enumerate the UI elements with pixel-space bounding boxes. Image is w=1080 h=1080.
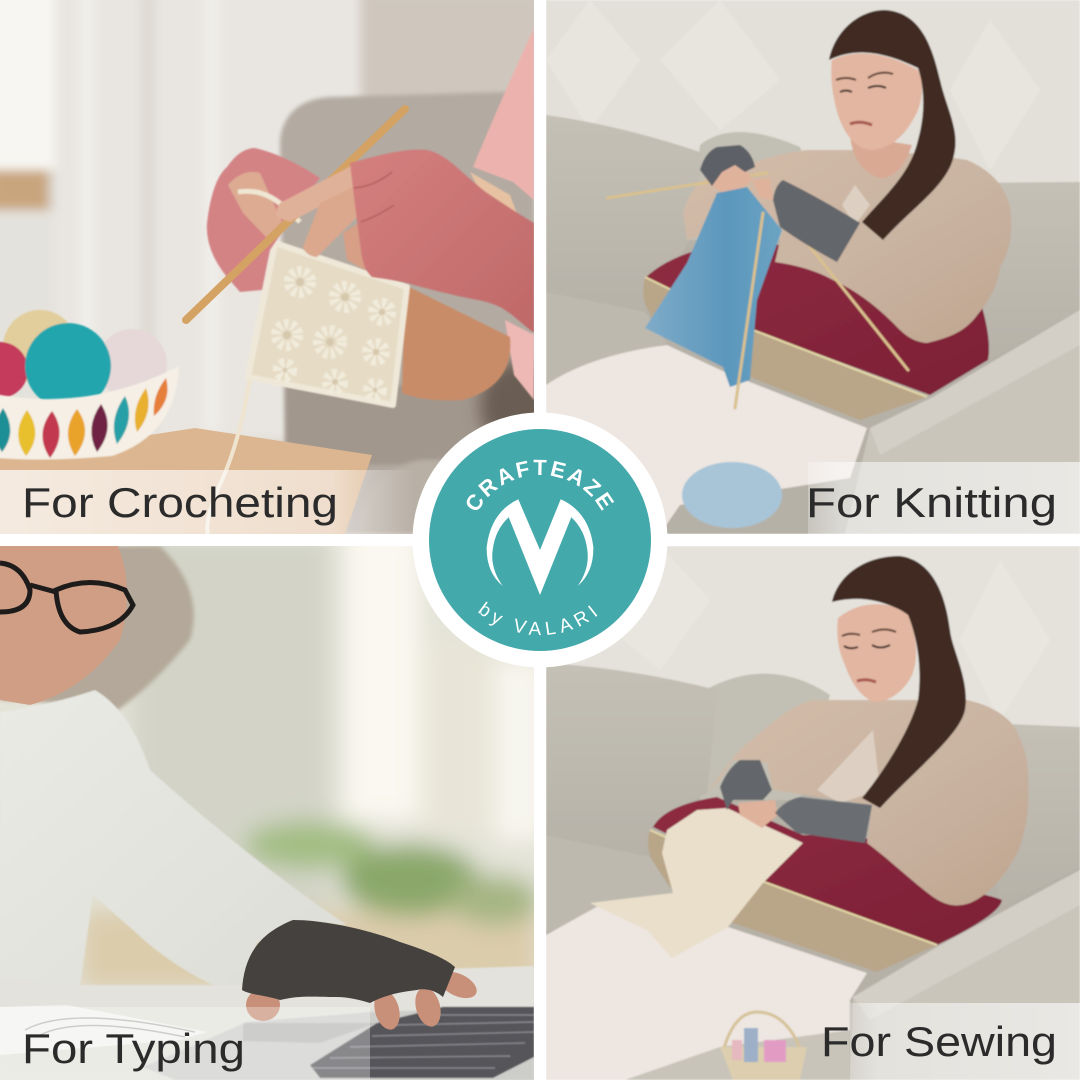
glasses [0, 563, 133, 632]
crochet square [248, 243, 407, 405]
panel: sewing photo [546, 546, 1080, 1080]
grey gloved hands [700, 145, 860, 262]
blue knitted panel [645, 187, 782, 387]
dark gloved hand [242, 920, 455, 1003]
brand name: CRAFTEAZE [466, 460, 614, 511]
pink top and skin [402, 28, 534, 400]
room backdrop [0, 0, 550, 550]
label: For Knitting: For Knitting [806, 479, 1057, 526]
face [837, 604, 916, 702]
sewing basket [720, 1012, 807, 1080]
knitting needles [607, 173, 908, 408]
hair [829, 10, 956, 240]
white skirt [546, 905, 867, 1080]
panel: typing photo [0, 530, 560, 1080]
open notebook [0, 1005, 207, 1055]
label: For Sewing: For Sewing [821, 1018, 1057, 1065]
label band [808, 462, 1080, 534]
armchair [280, 92, 550, 534]
grey hair [0, 546, 194, 715]
face [0, 546, 127, 705]
panel: crocheting photo [0, 0, 550, 550]
sweater [707, 700, 1028, 905]
sofa [546, 663, 1080, 1080]
label band [850, 1003, 1080, 1080]
crochet hook [186, 109, 405, 320]
byline: by VALARI [478, 602, 598, 636]
desk [70, 966, 534, 1004]
blue yarn ball [682, 462, 782, 528]
wall [546, 546, 1080, 846]
hair [832, 556, 966, 808]
sweater front light patch [817, 730, 880, 803]
laptop [143, 1007, 534, 1080]
cream fabric [590, 808, 803, 958]
M mark [487, 499, 593, 595]
wall [546, 0, 1080, 183]
bowl [0, 366, 179, 460]
teal disc [429, 429, 651, 651]
face [831, 53, 922, 150]
fingers [246, 972, 477, 1030]
yarn balls [0, 310, 167, 409]
yarn tail [207, 378, 250, 534]
neck and sweater front light patch [842, 135, 912, 225]
blurred room [0, 530, 560, 1080]
sweater [683, 150, 1011, 343]
label: For Crocheting: For Crocheting [22, 479, 338, 526]
left hand in pink glove [207, 148, 320, 292]
burgundy and tan pillow [643, 240, 989, 420]
label band [0, 1007, 370, 1080]
white trousers [546, 345, 867, 534]
right hand in pink glove [276, 150, 534, 333]
logo badge [412, 412, 668, 668]
panel: knitting photo [546, 0, 1080, 534]
white sweater [0, 690, 347, 997]
sofa [546, 115, 1080, 534]
white ring [412, 412, 668, 668]
burgundy and tan pillow [648, 797, 1002, 972]
label band [0, 470, 415, 534]
label: For Typing: For Typing [22, 1025, 245, 1072]
grey gloved hands [720, 760, 872, 843]
table [0, 428, 372, 534]
